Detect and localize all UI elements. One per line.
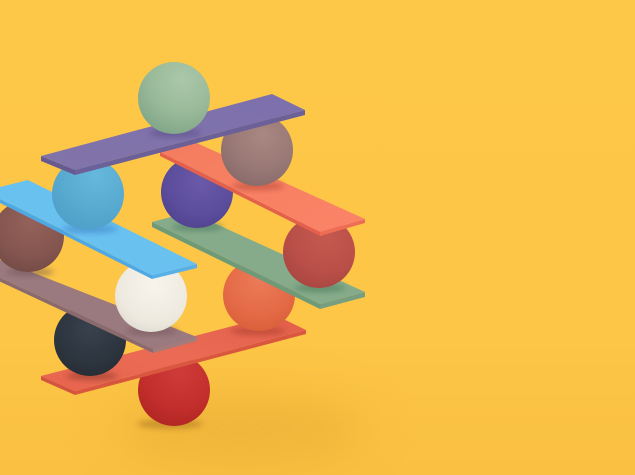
sphere: blue xyxy=(52,158,124,233)
plank: purple xyxy=(41,94,305,175)
sphere: brick red xyxy=(283,216,355,292)
sphere: taupe xyxy=(221,114,293,190)
ground shadow xyxy=(110,396,370,460)
plank: upper coral xyxy=(160,140,365,236)
sphere: indigo xyxy=(161,156,233,231)
plank: blue xyxy=(0,180,197,279)
sphere: green xyxy=(138,62,210,137)
plank: green xyxy=(152,212,365,309)
plank: bottom coral xyxy=(41,315,306,395)
sphere: black xyxy=(54,304,126,380)
plank: mauve xyxy=(0,255,197,353)
sphere: orange xyxy=(223,259,295,335)
sphere: white xyxy=(115,260,187,335)
sphere: crimson xyxy=(137,354,210,429)
sphere: brown xyxy=(0,200,64,276)
